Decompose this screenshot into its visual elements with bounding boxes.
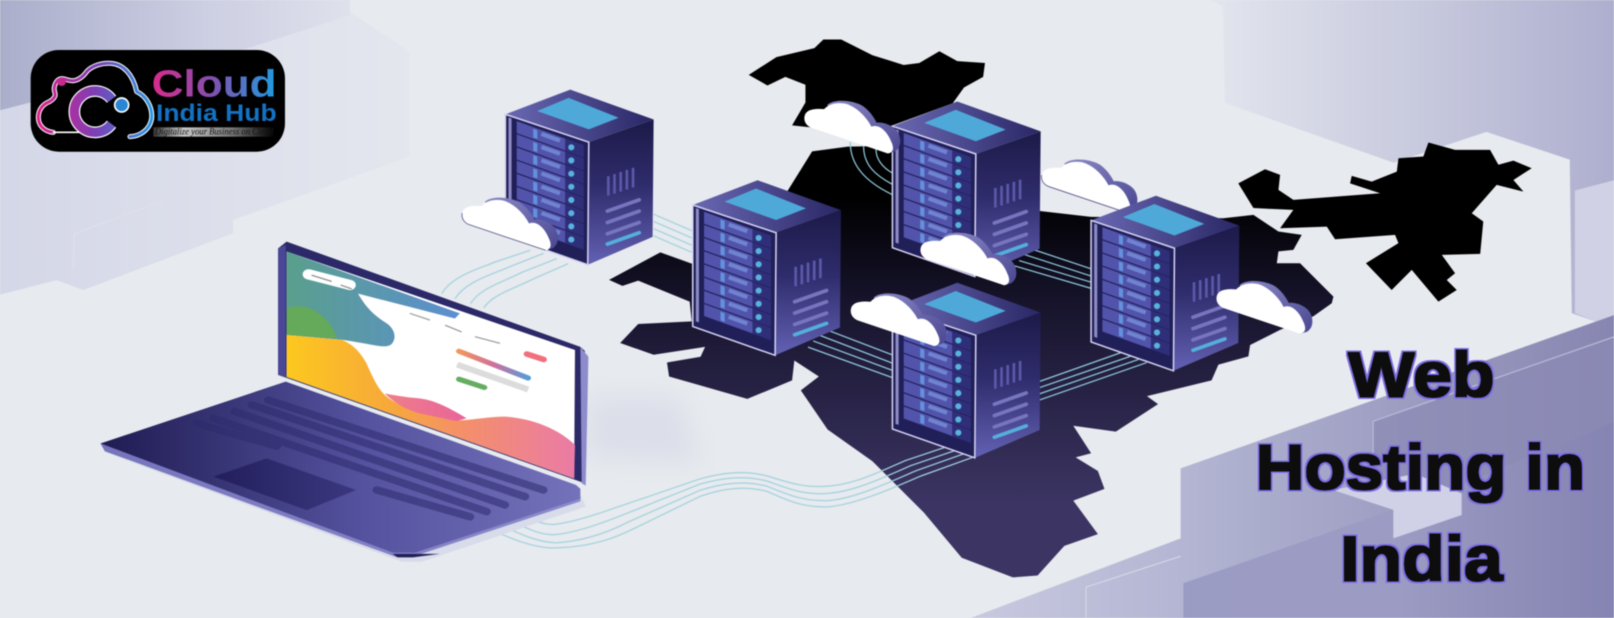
title: Web Hosting in India: India xyxy=(1340,524,1504,595)
laptop: trackpad xyxy=(213,458,356,510)
title: Web Hosting in India: Hosting in xyxy=(1256,433,1585,503)
wires: server 3 to server 4 xyxy=(1014,248,1091,288)
logo: wordmark Cloud: Cloud xyxy=(152,63,277,106)
wires: cloud to server 3 xyxy=(850,142,892,195)
laptop: base side xyxy=(100,443,580,557)
wires: laptop to server 5 xyxy=(490,445,973,548)
wires: server 2 to server 5 xyxy=(808,329,893,378)
title: Web Hosting in India xyxy=(1256,341,1585,595)
server 5 xyxy=(892,283,1041,458)
wires: server 5 to server 4 xyxy=(1038,352,1147,401)
laptop: lid xyxy=(278,242,585,483)
cloud 3 xyxy=(1041,160,1137,212)
cloud 5 xyxy=(851,293,947,346)
laptop xyxy=(100,242,588,562)
logo: wordmark India Hub: India Hub xyxy=(156,100,277,127)
background: bottom-right blocks xyxy=(971,315,1614,618)
cloud 2 xyxy=(804,101,900,153)
cloud 1 xyxy=(462,198,558,250)
background: top-left blocks xyxy=(0,0,410,295)
server 1 xyxy=(505,90,654,265)
logo: cloud icon xyxy=(38,63,152,137)
wires: server 1 to server 2 xyxy=(654,214,692,252)
cloud 6 xyxy=(1216,281,1312,334)
map of India xyxy=(609,39,1532,577)
soft shadow beside laptop xyxy=(587,397,700,464)
laptop: base top xyxy=(100,382,580,553)
laptop: ground shadow xyxy=(107,453,586,562)
map: north-east region xyxy=(1238,143,1532,302)
logo: black badge xyxy=(31,50,285,152)
server 3 xyxy=(892,101,1041,277)
laptop: keyboard xyxy=(196,400,543,517)
logo: Cloud India Hub xyxy=(31,50,285,152)
network wires xyxy=(442,142,1147,548)
title: Web Hosting in India: Web xyxy=(1348,341,1495,411)
cloud 4 xyxy=(920,233,1016,285)
wires: laptop to server 1 xyxy=(442,250,568,308)
map: main body xyxy=(609,146,1333,577)
map: northern region xyxy=(749,39,985,134)
laptop: screen xyxy=(287,251,575,479)
logo: tagline: Digitalize your Business on Cloud xyxy=(154,126,274,136)
server 4 xyxy=(1091,196,1239,371)
background: top-right blocks xyxy=(1209,0,1614,321)
server 2 xyxy=(693,180,841,355)
